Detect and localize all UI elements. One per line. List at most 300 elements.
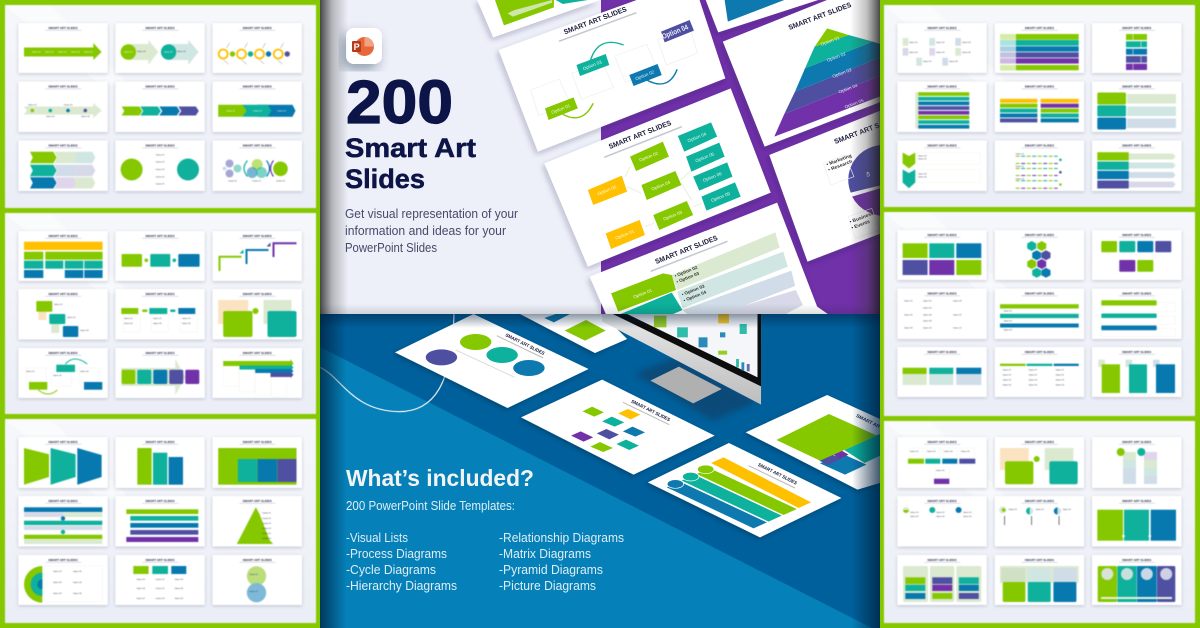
slide: pale columns with tiles	[897, 555, 987, 605]
mockup: pie slide: • Research	[827, 159, 853, 173]
mockup: pie slide	[767, 110, 880, 264]
slide: small square items	[897, 23, 987, 73]
slide: three headed lists	[115, 289, 205, 340]
panel: right group 2	[884, 212, 1195, 416]
icon: PowerPoint: P	[354, 42, 360, 52]
slide: large overlapping cards: SMART ART SLIDES	[1025, 440, 1054, 444]
slide: text table: Option 11	[953, 326, 962, 330]
mockup: pyramid slide: Option 03	[832, 67, 853, 79]
slide: stacked circles: Option 02	[249, 590, 259, 593]
mockup: slide with green arrow	[477, 0, 600, 37]
slide: nested semicircles: Option 04	[73, 581, 83, 584]
slide: three small circles: SMART ART SLIDES	[927, 499, 957, 503]
slide: text table: Option 05	[904, 314, 914, 316]
mockup: pyramid slide: Option 02	[826, 51, 847, 63]
slide: down chevrons: SMART ART SLIDES	[927, 144, 957, 148]
panel: left group 2	[5, 213, 316, 414]
slide: block hierarchy: SMART ART SLIDES	[48, 234, 78, 238]
slide: down chevrons: Option 01	[918, 154, 928, 158]
slide: three chevrons: SMART ART SLIDES	[243, 84, 272, 88]
mockup: partial slide	[520, 314, 627, 353]
mockup: list slide: SMART ART SLIDES	[654, 233, 719, 266]
mockup: pyramid slide	[723, 0, 899, 147]
slide: eight thin bars: SMART ART SLIDES	[927, 84, 957, 88]
slide: three headed lists: Option 01	[124, 317, 134, 320]
slide: triangle list: Option 02	[262, 517, 272, 520]
slide: two circles: Option 04	[156, 176, 165, 178]
mockup: circles slide	[395, 314, 589, 408]
slide: three lists: Option 05	[156, 587, 165, 590]
slide: nested semicircles: Option 06	[73, 592, 83, 595]
panel: bottom centre, what's included	[320, 314, 899, 628]
slide: venn circles	[212, 140, 302, 191]
slide: large overlapping cards	[995, 437, 1084, 488]
slide: triangle list: Option 06	[262, 537, 272, 540]
mockup: cycle slide: Option 03	[582, 59, 603, 71]
slide: small square items: Option 07	[923, 60, 933, 63]
slide: three columns of text: Option 01	[1028, 368, 1038, 372]
mockup: list slide: • Option 03	[676, 271, 700, 284]
slide: three bars with lists	[995, 288, 1084, 339]
slide: three chevrons: Option 02	[253, 110, 263, 112]
tilted slide mockups	[474, 0, 880, 314]
slide: nested semicircles: Option 05	[53, 592, 63, 595]
slide: half circles: Option 01	[1035, 508, 1045, 511]
slide: three lists: Option 02	[156, 578, 165, 581]
mockup: layered bands slide: SMART ART SLIDES	[757, 462, 799, 487]
slide: text table: Option 04	[923, 306, 933, 310]
text block: description	[345, 207, 518, 255]
monitor	[602, 314, 761, 421]
list: diagrams column 2: -Matrix Diagrams	[499, 547, 591, 561]
slide: labelled outlines: SMART ART SLIDES	[927, 440, 957, 444]
slide: three bars with lists: Option 01	[1003, 310, 1013, 312]
mockup: list slide: • Option 04	[683, 289, 708, 303]
mockup: pie slide: 5	[866, 172, 871, 179]
slide: three small circles: Option 01	[910, 511, 920, 514]
slide: three large columns: SMART ART SLIDES	[1122, 499, 1151, 503]
slide: overlapping cards	[212, 289, 302, 340]
mockup: pie slide: • Events	[851, 219, 871, 231]
mockup: hierarchy slide: Option 04	[687, 131, 708, 143]
slide: three columns of text: Option 04	[1055, 384, 1065, 386]
panel: top centre, 200 Smart Art Slides	[320, 0, 880, 314]
slide: block hierarchy	[18, 231, 108, 281]
slide: staggered boxes: Option 01	[54, 303, 64, 306]
heading: What's included: What’s included?	[346, 465, 534, 491]
slide: three small circles: Option 02	[910, 515, 920, 518]
slide: process boxes on arrow	[115, 348, 205, 398]
heading: Smart Art Slides: Slides	[345, 164, 425, 194]
heading: Smart Art Slides: Smart Art	[345, 133, 476, 163]
slide: three headed lists: Option 02	[153, 322, 163, 325]
slide: staggered boxes: SMART ART SLIDES	[48, 292, 78, 296]
slide: arrow: Option 05	[84, 50, 94, 54]
number: 200: 200	[346, 68, 453, 136]
mockup: cycle slide: Option 04	[660, 22, 690, 41]
slide: text table: Option 02	[923, 300, 933, 302]
slide: six colour tiles: SMART ART SLIDES	[927, 233, 957, 237]
slide: three columns of text: Option 02	[1055, 374, 1065, 376]
slide: three lists: Option 08	[156, 597, 165, 600]
slide: banded rows	[18, 496, 108, 546]
slide: dot timeline: Option 04	[81, 115, 91, 118]
mockup: cycle slide: Option 01	[551, 103, 572, 115]
mockup: treemap slide	[746, 395, 899, 490]
slide: text table: Option 08	[923, 320, 933, 322]
slide: dashed lines: SMART ART SLIDES	[1025, 144, 1054, 148]
list: diagrams column 1: -Hierarchy Diagrams	[346, 579, 457, 593]
mockup: hierarchy slide: Option 03	[662, 210, 683, 222]
slide: four columns with circles	[1092, 555, 1182, 605]
slide: three small circles: Option 01	[963, 511, 973, 514]
slide: triangle list: Option 05	[262, 532, 272, 535]
slide: stacked circles: SMART ART SLIDES	[243, 558, 272, 562]
slide: down chevrons: Option 02	[918, 158, 928, 160]
slide: three lists	[115, 555, 205, 605]
slide: labelled outlines: Option 01	[910, 450, 920, 453]
panel: left group 1	[5, 5, 316, 208]
mockup: layered bands slide	[648, 443, 841, 537]
panel: right group 1	[884, 5, 1195, 207]
mockup: pyramid panel top	[706, 0, 818, 32]
slide: labelled outlines: Option 03	[944, 450, 954, 453]
slide: nested semicircles: Option 01	[53, 570, 63, 573]
slide: two column bars: SMART ART SLIDES	[1025, 84, 1054, 88]
text block: description: PowerPoint Slides	[345, 241, 437, 255]
slide: arrow: Option 02	[45, 50, 55, 54]
panel: left group 3	[5, 419, 316, 623]
slide: labelled outlines: Option 05	[936, 469, 946, 472]
slide: three box flow: SMART ART SLIDES	[145, 234, 175, 238]
slide: dashed lines	[995, 140, 1084, 191]
text block: templates intro: 200 PowerPoint Slide Templates:	[346, 499, 515, 513]
slide: three lists: Option 03	[174, 578, 184, 581]
mockup: pie slide: SMART ART S	[833, 121, 881, 146]
slide: text table: Option 09	[904, 326, 914, 330]
slide: small square items: Option 02	[936, 41, 946, 44]
mockup: list slide	[586, 202, 828, 314]
slide: venn circles: Option 01	[228, 180, 238, 182]
slide: small square items: SMART ART SLIDES	[927, 26, 957, 30]
list: diagrams column 2: -Pyramid Diagrams	[499, 563, 603, 577]
slide: hexagons: SMART ART SLIDES	[1025, 233, 1054, 237]
slide: arrow: Option 01	[32, 50, 42, 54]
slide: circle arrows	[115, 23, 205, 73]
slide: two circles: Option 02	[156, 160, 165, 164]
slide: half circles: Option 01	[1008, 508, 1018, 511]
slide: circle arrows: Option 04	[177, 50, 187, 53]
slide: triangle list: SMART ART SLIDES	[243, 499, 272, 503]
slide: venn circles: SMART ART SLIDES	[243, 144, 272, 148]
slide: three small circles: Option 02	[936, 515, 946, 518]
slide: half circles	[995, 496, 1084, 546]
slide: six stacked bars	[995, 23, 1084, 73]
slide: three headed lists: Option 02	[124, 322, 134, 325]
slide: three box flow	[115, 231, 205, 281]
slide: three header tables: SMART ART SLIDES	[927, 350, 957, 354]
slide: horizontal bars	[115, 496, 205, 546]
mockup: cycle slide: SMART ART SLIDES	[562, 5, 628, 36]
slide: text table: SMART ART SLIDES	[927, 292, 957, 296]
slide: four chevrons: SMART ART SLIDES	[145, 84, 175, 88]
mockup: pyramid slide: Option 04	[838, 83, 859, 94]
slide: three columns of text: Option 04	[1002, 384, 1012, 386]
list: diagrams column 2	[499, 531, 624, 593]
slide: ring timeline: SMART ART SLIDES	[243, 26, 272, 30]
slide: rising steps: SMART ART SLIDES	[243, 234, 272, 238]
slide: two column bars	[995, 82, 1084, 132]
slide: hexagons	[995, 230, 1084, 280]
slide: three columns of text: Option 03	[1055, 378, 1065, 382]
slide: three headed lists: SMART ART SLIDES	[145, 292, 175, 296]
slide: four columns with circles: SMART ART SLIDES	[1122, 558, 1151, 562]
slide: three lists: Option 04	[136, 587, 146, 590]
mockup: cycle slide: Option 02	[634, 69, 655, 81]
slide: three small circles: Option 02	[963, 515, 973, 518]
heading: Smart Art Slides	[346, 138, 476, 188]
mockup: list slide: • Option 03	[681, 283, 706, 297]
mockup: speech bubbles slide: SMART ART SLIDES	[630, 399, 672, 423]
slide: two circles: Option 05	[156, 182, 165, 186]
slide: bars with outlines	[1092, 288, 1182, 339]
slide: labelled outlines: Option 04	[961, 450, 971, 453]
slide: two pale columns	[1092, 437, 1182, 488]
slide: three headed lists: Option 01	[182, 317, 192, 320]
slide: three chevrons	[212, 82, 302, 132]
slide: three large columns	[1092, 496, 1182, 546]
slide: bars with outlines: SMART ART SLIDES	[1122, 292, 1151, 296]
mockup: hierarchy slide: Option 02	[638, 151, 659, 163]
list: diagrams column 1	[346, 531, 457, 593]
slide: small square items: Option 01	[909, 41, 919, 44]
cable	[320, 314, 454, 412]
slide: two pale columns: SMART ART SLIDES	[1122, 440, 1151, 444]
slide: staggered boxes: Option 03	[80, 329, 90, 332]
slide: nested semicircles: SMART ART SLIDES	[48, 558, 78, 562]
slide: banded rows: SMART ART SLIDES	[48, 499, 78, 503]
slide: arrow: SMART ART SLIDES	[48, 26, 78, 30]
slide: three columns of text: Option 01	[1002, 368, 1012, 372]
slide: overlapping cards: SMART ART SLIDES	[243, 292, 272, 296]
mockup: hierarchy slide: Option 06	[597, 184, 618, 196]
mockup: treemap slide: SMART ART	[855, 413, 883, 431]
mockup: list slide: • Option 02	[674, 265, 699, 278]
slide: three bars with lists: Option 03	[1003, 328, 1013, 332]
slide: text table: Option 01	[904, 300, 914, 302]
mockup: hierarchy slide: Option 01	[614, 229, 635, 241]
slide: nested semicircles: Option 02	[73, 570, 83, 573]
slide: small square items: Option 03	[962, 41, 972, 44]
slide: small square items: Option 06	[962, 51, 972, 54]
slide: arrow: Option 04	[71, 50, 81, 54]
slide: triangle list	[212, 496, 302, 546]
slide: venn circles: Option 02	[252, 180, 262, 182]
mockup: hierarchy slide: SMART ART SLIDES	[607, 118, 673, 151]
slide: nested semicircles: Option 03	[53, 581, 63, 584]
slide: two circles	[115, 140, 205, 191]
slide: two circles: Option 03	[156, 168, 165, 171]
slide: brick stack	[1092, 23, 1182, 73]
slide: brick stack: SMART ART SLIDES	[1122, 26, 1151, 30]
slide: dashed lines: Option 03	[1015, 178, 1025, 180]
slide: framed columns: SMART ART SLIDES	[243, 440, 272, 444]
slide: rising steps	[212, 231, 302, 281]
slide: six colour tiles	[897, 230, 987, 280]
slide: small square items: Option 05	[936, 51, 946, 54]
slide: three headed lists: Option 01	[153, 317, 163, 320]
slide: three tall cards	[1092, 347, 1182, 397]
slide: box and pale rows: SMART ART SLIDES	[1122, 84, 1151, 88]
mockup: hierarchy slide	[544, 88, 771, 267]
slide: chevron grid	[18, 140, 108, 191]
slide: framed columns	[212, 437, 302, 488]
slide: three columns of text: Option 03	[1002, 378, 1012, 382]
slide: pale header with cards: SMART ART SLIDES	[1025, 558, 1054, 562]
slide: text table: Option 03	[953, 300, 963, 302]
slide: three small circles	[897, 496, 987, 546]
slide: three columns of text: Option 02	[1002, 374, 1012, 376]
mockup: hierarchy slide: Option 09	[710, 191, 731, 203]
slide: text table	[897, 288, 987, 339]
slide: three chevrons: Option 01	[226, 110, 236, 112]
slide: text table: Option 07	[953, 314, 963, 316]
slide: labelled outlines: Option 02	[927, 450, 937, 453]
mockup: circles slide: SMART ART SLIDES	[504, 333, 546, 357]
slide: pale columns with tiles: SMART ART SLIDES	[927, 558, 957, 562]
slide: dashed lines: Option 01	[1015, 152, 1025, 156]
slide: dot timeline	[18, 82, 108, 132]
slide: circle arrows: Option 01	[124, 51, 134, 54]
slide: pale header with cards	[995, 555, 1084, 605]
slide: three lists: Option 06	[174, 587, 184, 590]
slide: three small circles: Option 01	[936, 511, 946, 514]
slide: cycle with arcs: SMART ART SLIDES	[48, 351, 78, 355]
slide: venn circles: Option 03	[276, 180, 286, 182]
mockup: pie slide: • Marketing	[826, 153, 853, 168]
slide: arrow: Option 03	[58, 50, 68, 54]
slide: three tall cards: SMART ART SLIDES	[1122, 350, 1151, 354]
slide: two circles: SMART ART SLIDES	[145, 144, 175, 148]
list: diagrams column 1: -Cycle Diagrams	[346, 563, 436, 577]
slide: three bars with lists: SMART ART SLIDES	[1025, 292, 1054, 296]
mockup: hierarchy slide: Option 05	[694, 151, 715, 163]
text block: description: information and ideas for your	[345, 224, 506, 238]
slide: three lists: Option 07	[136, 597, 146, 600]
slide: process boxes on arrow: SMART ART SLIDES	[145, 351, 175, 355]
slide: three headed lists: Option 02	[182, 322, 192, 325]
mockup: hierarchy slide: Option 04	[651, 180, 672, 192]
slide: three columns of text: Option 02	[1028, 374, 1038, 376]
slide: rounded tiles	[1092, 230, 1182, 280]
slide: dot timeline: SMART ART SLIDES	[48, 84, 78, 88]
slide: three chevrons: Option 03	[277, 110, 287, 112]
mockup: pie slide: • Business	[849, 211, 875, 225]
slide: small square items: Option 08	[949, 60, 959, 63]
slide: three lists: Option 01	[136, 578, 146, 581]
slide: dot timeline: Option 02	[46, 115, 56, 118]
slide: cycle with arcs	[18, 348, 108, 398]
slide: four chevrons	[115, 82, 205, 132]
slide: two circles: Option 01	[156, 154, 165, 156]
slide: circle arrows: SMART ART SLIDES	[145, 26, 175, 30]
slide: dashed lines: Option 02	[1015, 165, 1025, 168]
slide: small square items: Option 04	[909, 51, 919, 54]
slide: three columns of text	[995, 347, 1084, 397]
slide: cycle with arcs: Option 01	[26, 370, 36, 373]
slide: nested semicircles	[18, 555, 108, 605]
text block: description: Get visual representation of your	[345, 207, 518, 221]
lighter diagonal band	[320, 347, 872, 628]
slide: dot timeline: Option 03	[64, 104, 73, 106]
list: diagrams column 1: -Process Diagrams	[346, 547, 447, 561]
slide: bar columns	[115, 437, 205, 488]
mockup: speech bubbles slide	[521, 380, 715, 475]
slide: three columns of text: Option 01	[1055, 368, 1065, 372]
slide: trapezoids	[18, 437, 108, 488]
slide: triangle list: Option 03	[262, 522, 272, 525]
purple backdrop	[601, 0, 880, 314]
slide: cycle with arcs: Option 03	[80, 370, 90, 373]
slide: half circles: SMART ART SLIDES	[1025, 499, 1054, 503]
slide: horizontal bars: SMART ART SLIDES	[145, 499, 175, 503]
slide: eight thin bars	[897, 82, 987, 132]
mockup: pyramid slide: Option 05	[844, 98, 865, 109]
slide: bar columns: SMART ART SLIDES	[145, 440, 175, 444]
slide: down chevrons: Option 03	[918, 172, 928, 176]
slide: staggered boxes: Option 02	[67, 316, 77, 319]
slide: triangle list: Option 01	[262, 512, 272, 514]
slide: triangle list: Option 04	[262, 527, 272, 530]
mockup: hierarchy slide: Option 06	[702, 171, 723, 183]
slide: cycle with arcs: Option 02	[53, 374, 63, 377]
slide: stacked circles: Option 01	[249, 573, 259, 576]
slide: box and pale rows	[1092, 82, 1182, 132]
slide: rounded tiles: SMART ART SLIDES	[1122, 233, 1151, 237]
slide: chevron grid: SMART ART SLIDES	[48, 144, 78, 148]
slide: three columns of text: SMART ART SLIDES	[1025, 350, 1054, 354]
slide: six stacked bars: SMART ART SLIDES	[1025, 26, 1054, 30]
list: diagrams column 2: -Relationship Diagrams	[499, 531, 624, 545]
slide: staggered boxes	[18, 289, 108, 340]
slide: labelled outlines	[897, 437, 987, 488]
slide: dot timeline: Option 01	[28, 104, 38, 106]
slide: three header tables	[897, 347, 987, 397]
slide: down chevrons: Option 04	[918, 176, 928, 178]
slide: ring timeline	[212, 23, 302, 73]
slide: arrow	[18, 23, 108, 73]
mockup: list slide: Option 01	[632, 288, 653, 300]
slide: half circles: Option 01	[1062, 508, 1072, 511]
mockup: pyramid slide: Option 01	[820, 35, 841, 47]
slide: three lists: Option 09	[174, 597, 184, 600]
slide: text table: Option 06	[923, 314, 933, 316]
slide: arrow staircase: SMART ART SLIDES	[243, 351, 272, 355]
slide: three columns of text: Option 03	[1028, 378, 1038, 382]
slide: three lists: SMART ART SLIDES	[145, 558, 175, 562]
list: diagrams column 2: -Picture Diagrams	[499, 579, 596, 593]
slide: text table: Option 10	[923, 326, 933, 330]
panel: right group 3	[884, 421, 1195, 623]
slide: arrow staircase	[212, 348, 302, 398]
icon: PowerPoint	[346, 28, 382, 64]
slide: three columns of text: Option 04	[1028, 384, 1038, 386]
slide: down chevrons	[897, 140, 987, 191]
slide: boxes with pale arrows: SMART ART SLIDES	[1122, 144, 1151, 148]
slide: circle arrows: Option 02	[164, 51, 174, 54]
slide: circle arrows: Option 03	[137, 50, 147, 53]
list: diagrams column 1: -Visual Lists	[346, 531, 408, 545]
